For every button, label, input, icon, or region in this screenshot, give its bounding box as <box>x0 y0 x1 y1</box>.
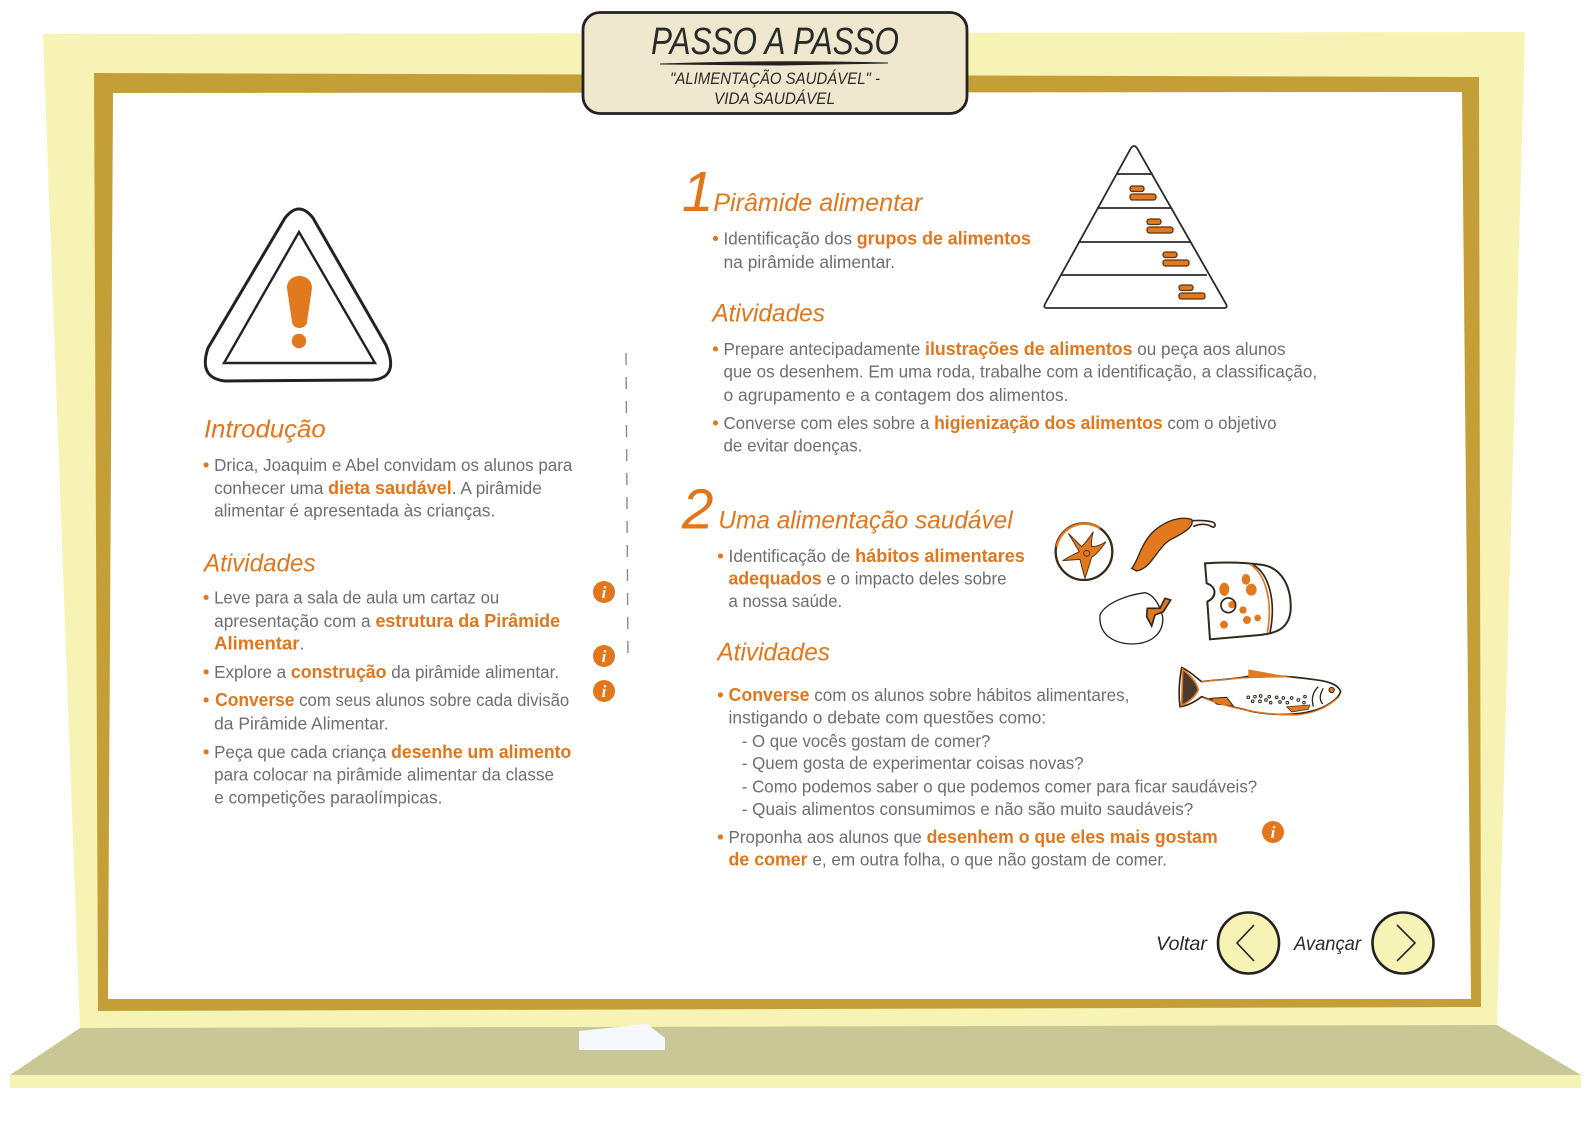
icon: info 4 <box>1262 821 1284 843</box>
heading: Pirâmide alimentar: Pirâmide alimentar <box>713 189 924 217</box>
text block: introduction: • <box>203 455 209 475</box>
panel: introduction and activities <box>202 415 572 808</box>
text block: activities list: apresentação com a estrutura da Pirâmide <box>214 610 560 631</box>
step number 2: 2 <box>681 479 713 542</box>
text block: activities list: • <box>203 662 209 682</box>
text block: step 2 activities: Proponha aos alunos que desenhem o que eles mais gostam <box>729 826 1218 847</box>
text block: step 1 activities: • <box>712 339 719 359</box>
heading: Atividades: Atividades <box>715 639 830 667</box>
text block: introduction <box>203 455 572 520</box>
subtitle <box>670 69 880 108</box>
text block: step 2 activities: instigando o debate com questões como: <box>729 707 1046 727</box>
title: PASSO A PASSO <box>651 21 899 63</box>
title plaque <box>583 12 967 114</box>
icon: forward arrow <box>1372 912 1434 974</box>
title underline <box>660 62 888 65</box>
navigation: forward: Avançar <box>1293 934 1362 955</box>
text block: step 2 intro <box>717 545 1025 611</box>
text block: step 2 intro: adequados e o impacto deles sobre <box>729 567 1007 588</box>
icon: info 3 <box>593 680 615 702</box>
text block: step 2 activities: de comer e, em outra folha, o que não gostam de comer. <box>729 849 1167 870</box>
subtitle: "ALIMENTAÇÃO SAUDÁVEL" - <box>670 69 880 88</box>
text block: activities list: Converse com seus alunos sobre cada divisão <box>215 689 569 710</box>
text block: step 1 activities: de evitar doenças. <box>723 436 862 456</box>
text block: step 1 activities: o agrupamento e a contagem dos alimentos. <box>723 385 1068 405</box>
text block: step 2 activities: - Como podemos saber o que podemos comer para ficar saudáveis? <box>742 776 1257 796</box>
icon: info 1: i <box>602 583 607 602</box>
step number 1: 1 <box>682 161 713 224</box>
heading: Atividades: Atividades <box>710 300 825 328</box>
heading: Introdução: Introdução <box>204 415 326 443</box>
text block: step 1 intro: • <box>712 229 719 249</box>
text block: activities list: Leve para a sala de aula um cartaz ou <box>214 588 499 608</box>
icon: info 2: i <box>602 647 607 666</box>
text block: step 2 activities: • <box>717 685 724 705</box>
navigation: forward <box>1293 912 1434 974</box>
icon: food pyramid <box>1044 146 1227 308</box>
text block: activities list: da Pirâmide Alimentar. <box>214 714 389 734</box>
text block: step 1 intro: na pirâmide alimentar. <box>723 252 895 272</box>
text block: activities list: • <box>203 690 209 710</box>
navigation: back: Voltar <box>1156 934 1208 955</box>
text block: activities list: • <box>203 742 209 762</box>
text block: activities list: • <box>203 588 209 608</box>
text block: step 1 activities <box>712 338 1317 456</box>
text block: step 2 activities: • <box>717 827 724 847</box>
icon: info 4: i <box>1271 823 1276 842</box>
text block: step 2 activities <box>717 684 1257 870</box>
icon: warning triangle <box>205 209 391 381</box>
text block: step 1 activities: Converse com eles sobre a higienização dos alimentos com o objetivo <box>723 412 1277 433</box>
text block: introduction: conhecer uma dieta saudável. A pirâmide <box>214 477 542 498</box>
icon: fish <box>1179 668 1341 715</box>
text block: introduction: alimentar é apresentada às crianças. <box>214 500 495 520</box>
icon: bell pepper <box>1100 593 1171 644</box>
text block: activities list <box>203 588 571 808</box>
text block: step 2 activities: Converse com os alunos sobre hábitos alimentares, <box>729 684 1129 705</box>
text block: activities list: e competições paraolímpicas. <box>214 788 442 808</box>
text block: step 2 intro: • <box>717 546 724 566</box>
text block: step 1 activities: Prepare antecipadamente ilustrações de alimentos ou peça aos alunos <box>723 338 1286 359</box>
text block: activities list: Explore a construção da pirâmide alimentar. <box>214 661 559 682</box>
text block: step 1 intro: Identificação dos grupos de alimentos <box>723 228 1031 249</box>
icon: food illustrations <box>1056 518 1341 715</box>
text block: step 2 intro: Identificação de hábitos alimentares <box>729 545 1025 566</box>
text block: step 1 activities: • <box>712 413 719 433</box>
chalk tray <box>10 1025 1581 1088</box>
text block: step 2 activities: - O que vocês gostam de comer? <box>742 731 990 751</box>
icon: chili pepper <box>1132 518 1215 571</box>
panel: step 1 <box>682 161 1317 456</box>
text block: activities list: Alimentar. <box>214 632 304 653</box>
text block: step 1 activities: que os desenhem. Em uma roda, trabalhe com a identificação, a classificação, <box>723 361 1317 381</box>
board writing surface <box>108 92 1471 999</box>
icon: star fruit slice <box>1056 523 1112 580</box>
text block: step 2 activities: - Quais alimentos consumimos e não são muito saudáveis? <box>742 799 1193 819</box>
board gold frame <box>94 73 1481 1011</box>
piece of chalk <box>579 1024 665 1050</box>
icon: cheese wedge <box>1205 562 1291 639</box>
text block: activities list: Peça que cada criança desenhe um alimento <box>214 741 571 762</box>
text block: step 2 intro: a nossa saúde. <box>729 591 842 611</box>
heading: Uma alimentação saudável: Uma alimentação saudável <box>718 507 1014 535</box>
heading: Atividades: Atividades <box>202 549 316 577</box>
subtitle: VIDA SAUDÁVEL <box>714 89 835 108</box>
icon: info 2 <box>593 645 615 667</box>
icon: back arrow <box>1218 912 1279 974</box>
navigation: back <box>1156 912 1279 974</box>
text block: step 2 activities: - Quem gosta de experimentar coisas novas? <box>742 753 1084 773</box>
text block: activities list: para colocar na pirâmide alimentar da classe <box>214 764 554 784</box>
text block: introduction: Drica, Joaquim e Abel convidam os alunos para <box>214 455 572 475</box>
icon: info 1 <box>593 581 615 603</box>
panel: step 2 <box>681 479 1257 870</box>
icon: info 3: i <box>602 682 607 701</box>
text block: step 1 intro <box>712 228 1031 272</box>
